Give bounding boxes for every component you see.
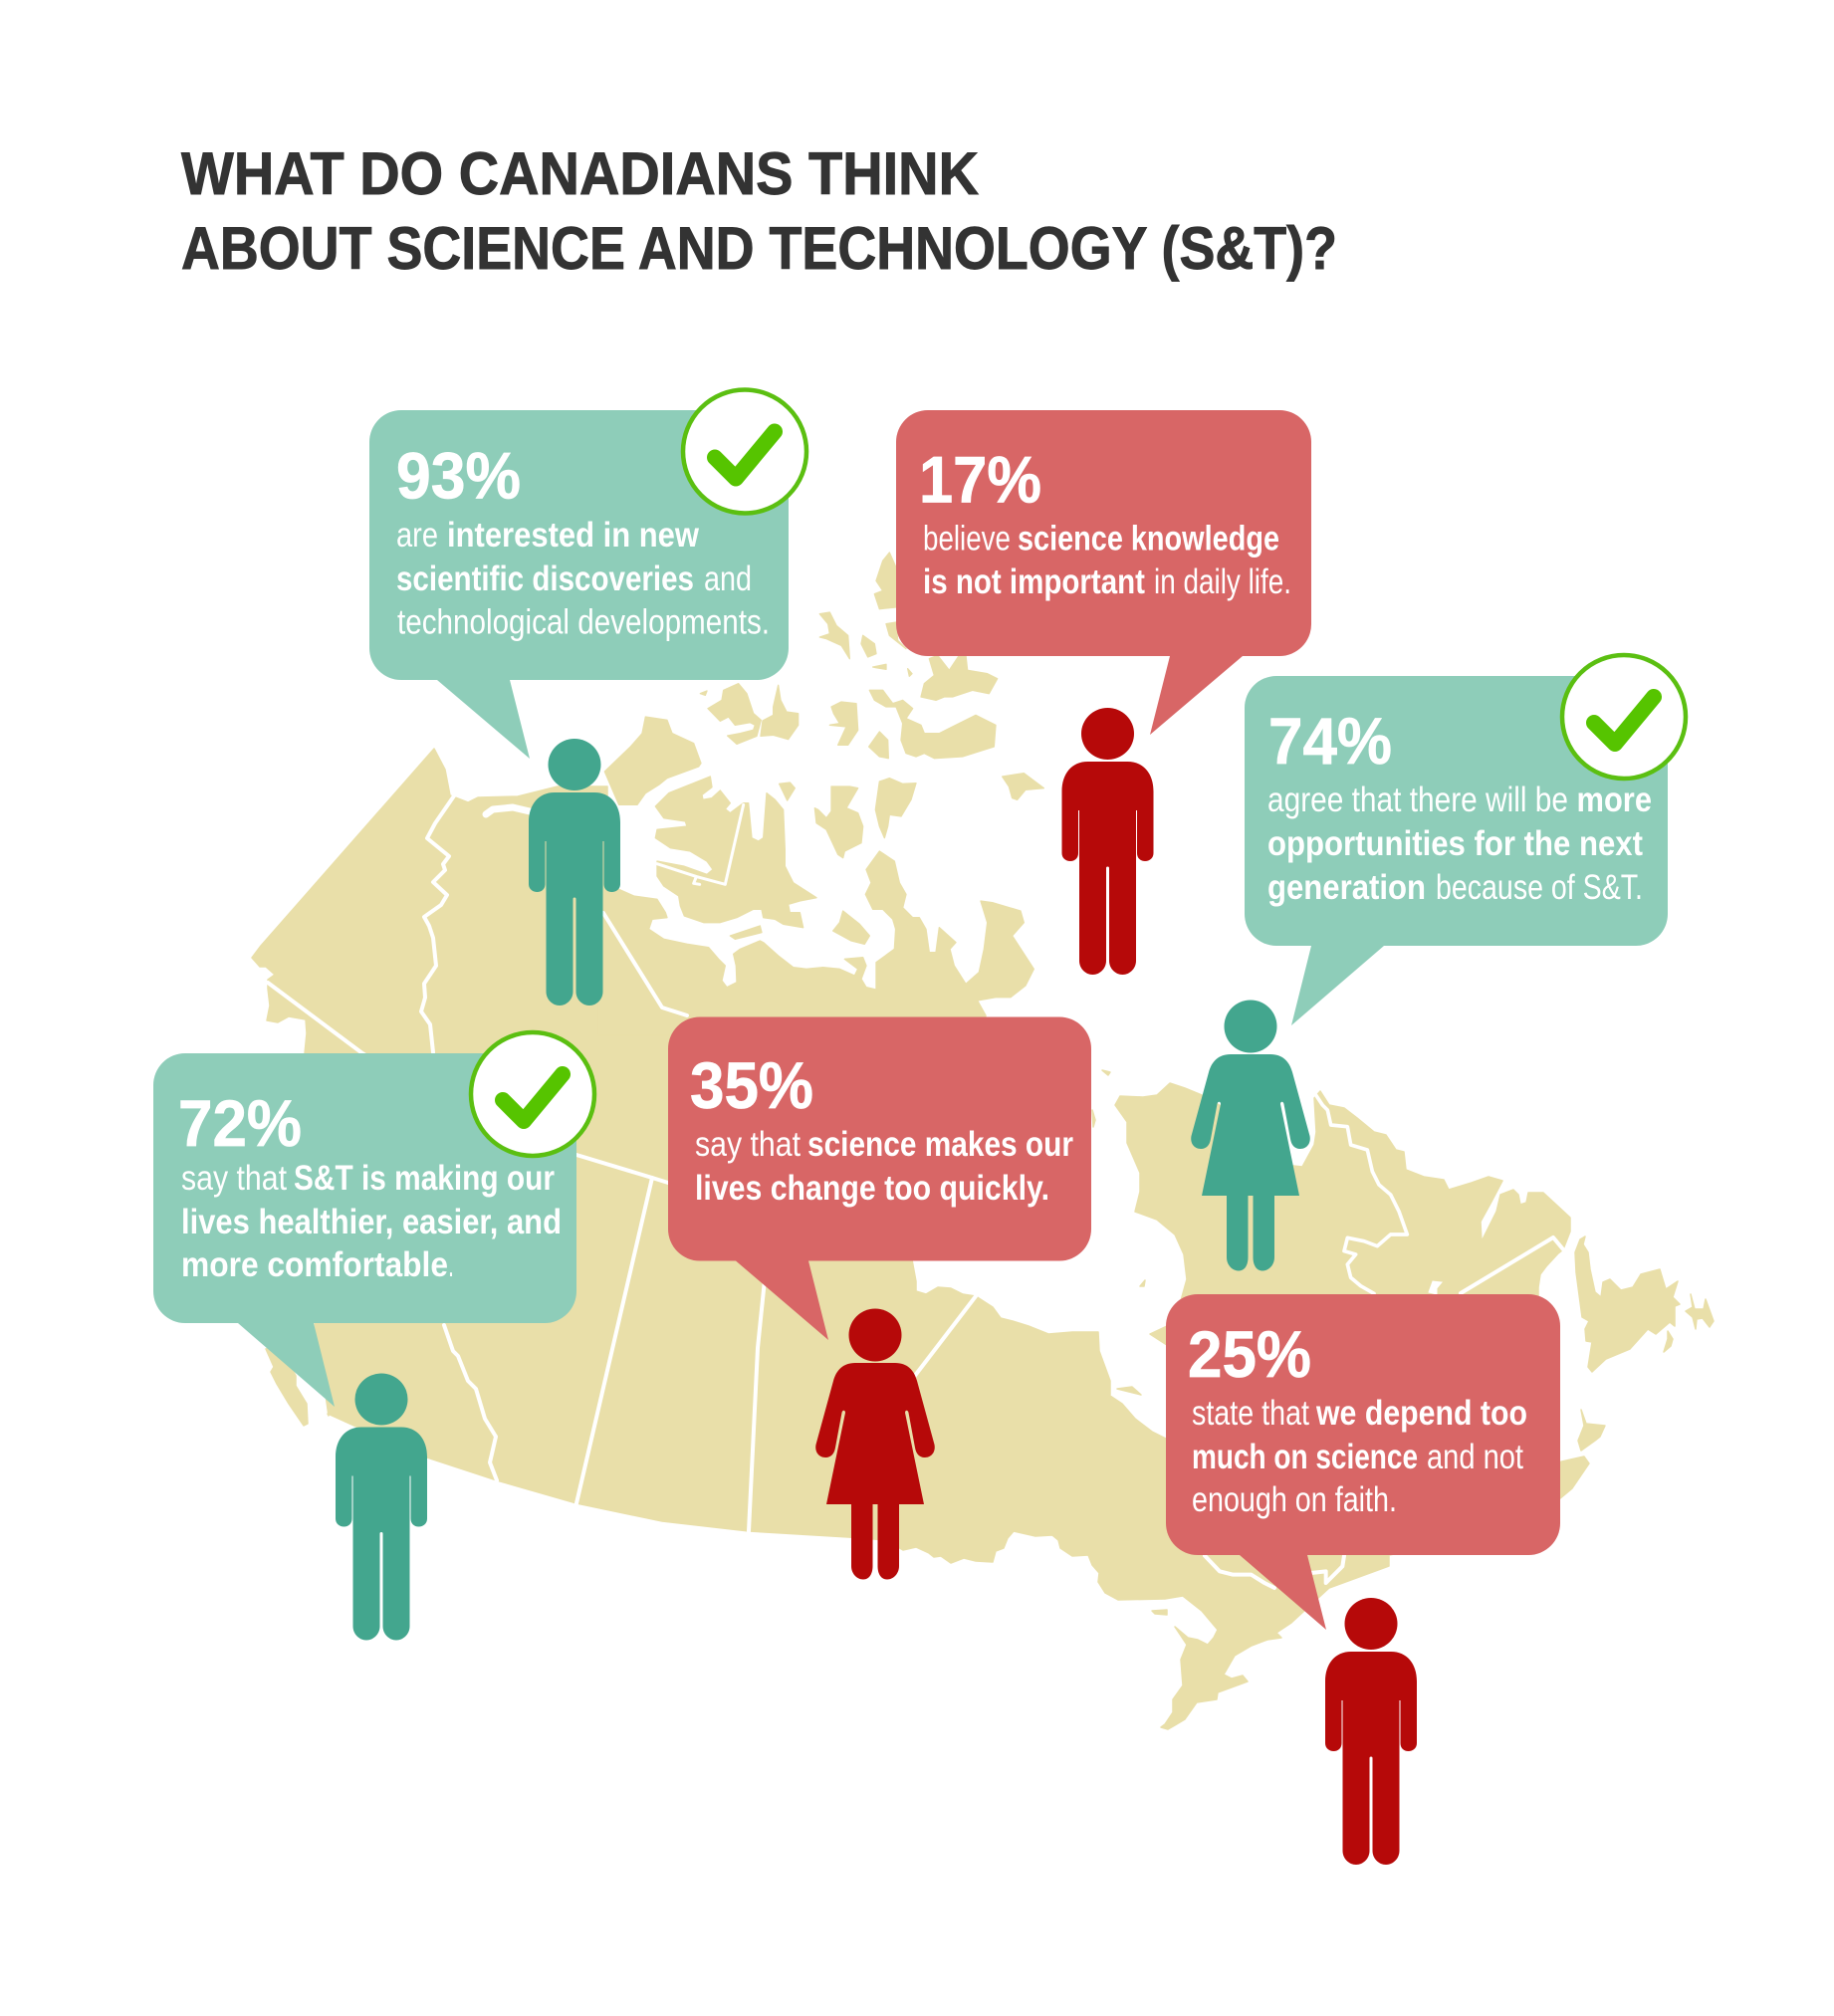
icon: check mark 93% [683,390,806,514]
callout: 93% interested: scientific discoveries [396,560,694,598]
callout: 72% healthier: 72% [178,1086,302,1160]
callout: 74% more opportunities [1245,655,1686,1025]
callout: 25% depend too much: much on science [1192,1438,1418,1476]
person: red man, 25% [1325,1598,1417,1865]
callout: 72% healthier: . [448,1245,454,1284]
callout: 93% interested: and [704,560,752,598]
callout: 72% healthier: S&T is making our [294,1159,555,1198]
callout: 35% change too quickly: lives change too quickly. [695,1169,1049,1208]
callout: 72% healthier: say that [181,1159,287,1198]
callout: 17% not important: 17% [919,442,1041,516]
callout: 74% more opportunities: more [1577,781,1652,819]
callout: 25% depend too much: 25% [1188,1317,1311,1391]
title [181,140,1337,282]
callout: 72% healthier: more comfortable [181,1245,448,1284]
callout: 74% more opportunities: opportunities for the next [1267,824,1643,863]
icon: check mark 74% [1562,655,1686,779]
callout: 35% change too quickly [668,1017,1091,1340]
person: red man, 17% [1061,708,1153,975]
person: green man, 72% [336,1374,427,1641]
callout: 72% healthier [153,1032,594,1407]
title: ABOUT SCIENCE AND TECHNOLOGY (S&T)? [181,215,1337,282]
callout: 74% more opportunities: because of S&T. [1436,868,1643,907]
callout: 93% interested: interested in new [447,516,700,555]
callout: 35% change too quickly: say that [695,1125,801,1164]
callout: 17% not important: is not important [923,562,1145,601]
callout: 17% not important: science knowledge [1018,520,1279,558]
callout: 25% depend too much [1166,1294,1560,1630]
callout: 93% interested: 93% [396,438,521,512]
callout: 74% more opportunities: 74% [1268,704,1392,778]
callout: 93% interested: technological developments. [397,603,770,641]
icon: check mark 72% [471,1032,594,1156]
callout: 17% not important [896,410,1311,735]
callout: 17% not important: in daily life. [1154,562,1291,601]
callout: 25% depend too much: we depend too [1315,1394,1527,1433]
callout: 25% depend too much: enough on faith. [1192,1480,1397,1519]
person: red woman, 35% [815,1308,935,1579]
callout: 25% depend too much: and not [1427,1438,1523,1476]
callout: 72% healthier: lives healthier, easier, and [181,1203,562,1241]
callout: 93% interested: are [396,516,438,555]
callout: 74% more opportunities: generation [1267,868,1426,907]
person: green woman, 74% [1191,1000,1310,1270]
callout: 17% not important: believe [923,520,1011,558]
callout: 25% depend too much: state that [1192,1394,1309,1433]
person: green man, 93% [529,739,620,1006]
title: WHAT DO CANADIANS THINK [181,140,979,207]
callout: 35% change too quickly: 35% [690,1048,813,1122]
callout: 74% more opportunities: agree that there will be [1267,781,1568,819]
map of Canada [252,553,1714,1729]
callout: 93% interested [369,390,806,759]
callout: 35% change too quickly: science makes our [807,1125,1073,1164]
